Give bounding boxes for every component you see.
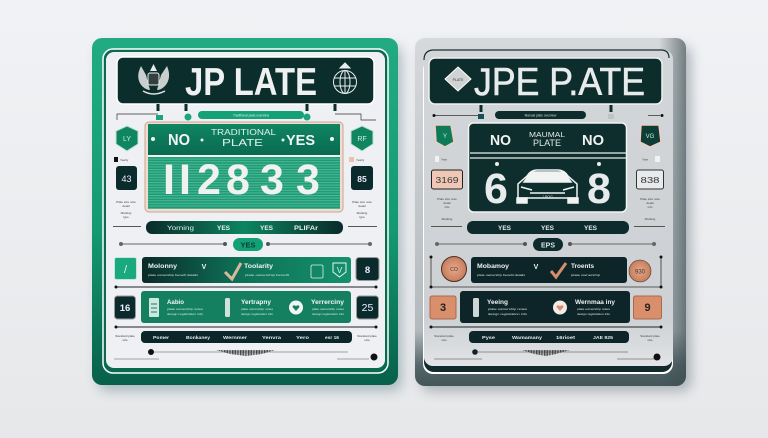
status bar: Yorning YES YES PLIFAr bbox=[146, 221, 343, 234]
feature row 2: Yerrerciny bbox=[311, 300, 345, 306]
feature row 1: Troents bbox=[571, 263, 594, 270]
connector with YES pill bbox=[119, 238, 372, 251]
footer bar: Pyse bbox=[482, 335, 495, 341]
left side badges: detail bbox=[122, 204, 130, 208]
tile: 3: 3 bbox=[440, 302, 446, 314]
coin: CO bbox=[450, 267, 458, 273]
right side badges: Yearly bbox=[356, 158, 365, 162]
tile: 25: 25 bbox=[362, 302, 373, 314]
feature row 1: Toolarity bbox=[244, 263, 273, 270]
title text: JP LATE bbox=[185, 61, 317, 104]
right side badges: detail bbox=[646, 201, 654, 205]
feature row 2: Yeeing bbox=[487, 300, 508, 306]
status bar: Yorning YES YES PLIFAr: YES bbox=[260, 225, 274, 232]
badge: 3169: 3169 bbox=[436, 176, 459, 185]
right side badges: Marking bbox=[357, 211, 368, 215]
feature row 1: plate ownership benefit bbox=[245, 273, 289, 277]
tile: 9: 9 bbox=[644, 302, 651, 314]
icon: diamond bbox=[445, 67, 471, 91]
icon: car bbox=[517, 170, 578, 203]
footer bar: Bonkaney bbox=[186, 335, 210, 341]
left side badges: Yearly bbox=[120, 158, 129, 162]
plate label: MANUAL PLATE bbox=[529, 130, 565, 148]
footer bar: 16rioet bbox=[556, 335, 575, 341]
badge: 838: 838 bbox=[640, 176, 660, 185]
feature row 2: Aabio bbox=[167, 300, 184, 306]
connector stubs and subtitle pill bbox=[117, 104, 376, 120]
icon: check bbox=[551, 263, 566, 277]
right side badges bbox=[348, 126, 377, 227]
footer bar: size bbox=[441, 338, 447, 342]
feature row 1: plate ownership benefit details bbox=[477, 273, 526, 277]
connector with EPS pill bbox=[435, 238, 656, 251]
bottom scale bbox=[114, 349, 378, 360]
feature row 1: Molonny bbox=[148, 263, 177, 270]
connector with YES pill: YES bbox=[240, 240, 256, 250]
icon: heart bbox=[553, 300, 567, 314]
footer bar: Wernmer bbox=[223, 335, 247, 341]
footer bar: Wamamany bbox=[512, 335, 542, 341]
badge: 43: 43 bbox=[121, 174, 132, 184]
icon: diamond: PLATE bbox=[453, 78, 464, 82]
panel: manual plate (silver) bbox=[415, 38, 691, 391]
feature row 2: design registration info bbox=[167, 312, 203, 316]
status bar: YES YES YES bbox=[467, 221, 629, 234]
plate label: TRADITIONAL PLATE bbox=[211, 128, 277, 149]
icon: marker bbox=[473, 298, 479, 317]
right side badges: detail bbox=[358, 204, 366, 208]
title bar: JPE P.ATE bbox=[429, 58, 662, 104]
footer bar: Standard plate bbox=[640, 334, 660, 338]
tile: 8: 8 bbox=[365, 265, 370, 276]
coin: 930 bbox=[635, 270, 646, 276]
right side badges: Marking bbox=[645, 217, 656, 221]
icon: car: 1 POG bbox=[542, 195, 553, 199]
feature row 1: V bbox=[202, 264, 207, 271]
footer bar: size bbox=[122, 338, 128, 342]
connector stubs and subtitle pill bbox=[432, 105, 664, 119]
footer bar: Standard plate bbox=[115, 334, 135, 338]
feature row 1: Mobamoy bbox=[477, 263, 509, 270]
icon: globe bbox=[334, 63, 356, 94]
feature row 2: design registration info bbox=[577, 312, 610, 316]
plate digit: 6: 6 bbox=[484, 165, 508, 213]
footer bar: Pomer bbox=[153, 335, 169, 341]
left side badges: Year bbox=[441, 158, 447, 162]
footer bar: esr 16 bbox=[325, 335, 339, 341]
right side badges: Year bbox=[642, 158, 648, 162]
icon: tag bbox=[149, 298, 159, 317]
plate label: MANUAL PLATE: PLATE bbox=[533, 138, 561, 148]
connector with EPS pill: EPS bbox=[541, 242, 555, 250]
status bar: Yorning YES YES PLIFAr: PLIFAr bbox=[294, 225, 319, 232]
plate number: II2833 bbox=[163, 156, 320, 204]
tile: slash bbox=[114, 258, 136, 280]
footer bar bbox=[434, 331, 660, 343]
icon: document bbox=[311, 265, 323, 278]
feature row 2: plate ownership notes bbox=[577, 307, 611, 311]
feature row 1 bbox=[114, 257, 379, 283]
title text: JPE P.ATE bbox=[474, 61, 645, 104]
icon: marker bbox=[225, 298, 230, 317]
panel: traditional plate (green) bbox=[92, 38, 402, 391]
footer bar: size bbox=[364, 338, 370, 342]
icon: crest bbox=[138, 64, 169, 94]
bottom scale bbox=[434, 349, 660, 360]
plate digit: 8: 8 bbox=[587, 165, 611, 213]
badge: 85: 85 bbox=[357, 174, 367, 184]
icon: shield: VG bbox=[646, 134, 655, 140]
status bar: YES YES YES: YES bbox=[584, 225, 598, 232]
footer bar: Yenvra bbox=[262, 335, 281, 341]
feature row 1 bbox=[430, 256, 662, 288]
icon: check bbox=[225, 263, 241, 279]
left side badges: Marking bbox=[442, 217, 453, 221]
feature row 2: Yertrapny bbox=[241, 300, 272, 306]
left side badges: info bbox=[445, 205, 450, 209]
plate label: TRADITIONAL PLATE: PLATE bbox=[222, 137, 263, 149]
left side badges bbox=[431, 125, 462, 227]
connector stubs and subtitle pill: Traditional plate overview bbox=[233, 114, 270, 118]
icon: V badge: V bbox=[337, 266, 343, 275]
feature row 1: plate ownership bbox=[571, 273, 600, 277]
feature row 2 bbox=[430, 291, 662, 323]
tile: 8 bbox=[356, 258, 379, 280]
footer bar: size bbox=[647, 338, 653, 342]
feature row 1: plate ownership benefit details bbox=[148, 273, 199, 277]
left side badges: type bbox=[123, 215, 129, 219]
plate label: YES: YES bbox=[286, 132, 315, 149]
plate label: NO: NO bbox=[582, 132, 604, 149]
coin bbox=[629, 260, 651, 282]
tile: 3 bbox=[430, 296, 456, 319]
plate: traditional bbox=[145, 122, 343, 212]
tile: 16 bbox=[114, 296, 136, 319]
status bar: YES YES YES: YES bbox=[541, 225, 555, 232]
plate label: NO: NO bbox=[490, 132, 511, 149]
plate: manual bbox=[468, 123, 626, 213]
right side badges: Plate size note bbox=[640, 197, 660, 201]
status bar: Yorning YES YES PLIFAr: Yorning bbox=[167, 225, 194, 232]
feature row 2: plate ownership notes bbox=[241, 307, 274, 311]
left side badges: Marking bbox=[121, 211, 132, 215]
tile: 16: 16 bbox=[120, 303, 130, 314]
plate label: NO: NO bbox=[168, 132, 190, 149]
icon: V badge bbox=[333, 263, 346, 277]
feature row 2: plate ownership notes bbox=[312, 307, 345, 311]
feature row 1: V bbox=[534, 264, 539, 271]
feature row 2: design registration info bbox=[312, 312, 344, 316]
footer bar: Standard plate bbox=[357, 334, 377, 338]
title bar: JP LATE bbox=[117, 57, 374, 104]
feature row 2 bbox=[114, 291, 378, 323]
status bar: YES YES YES: YES bbox=[498, 225, 512, 232]
left side badges: Plate size note bbox=[437, 197, 457, 201]
right side badges: type bbox=[359, 215, 365, 219]
plate label: TRADITIONAL PLATE: TRADITIONAL bbox=[211, 128, 277, 137]
footer bar: JAE 925 bbox=[593, 335, 613, 341]
tile: 9 bbox=[634, 296, 662, 319]
right side badges bbox=[634, 125, 665, 227]
feature row 2: design registration info bbox=[488, 312, 527, 316]
icon: shield RF: RF bbox=[357, 136, 367, 143]
icon: shield: Y bbox=[443, 134, 447, 140]
left side badges bbox=[113, 126, 141, 227]
icon: shield LY: LY bbox=[123, 136, 131, 143]
icon: heart bbox=[289, 300, 303, 314]
footer bar: Yero bbox=[296, 335, 309, 341]
right side badges: Plate size note bbox=[352, 200, 372, 204]
feature row 2: plate ownership notes bbox=[488, 307, 528, 311]
footer bar bbox=[115, 331, 377, 343]
left side badges: detail bbox=[443, 201, 451, 205]
left side badges: Plate size note bbox=[116, 200, 136, 204]
footer bar: Standard plate bbox=[434, 334, 454, 338]
status bar: Yorning YES YES PLIFAr: YES bbox=[217, 225, 231, 232]
coin bbox=[442, 256, 466, 282]
connector stubs and subtitle pill: Manual plate overview bbox=[525, 114, 557, 118]
feature row 2: plate ownership notes bbox=[167, 307, 204, 311]
feature row 2: design registration info bbox=[241, 312, 273, 316]
right side badges: info bbox=[648, 205, 653, 209]
tile: slash: / bbox=[124, 264, 128, 276]
plate label: MANUAL PLATE: MAUMAL bbox=[529, 130, 565, 139]
feature row 2: Wernmaa iny bbox=[575, 300, 616, 306]
tile: 25 bbox=[356, 296, 378, 319]
